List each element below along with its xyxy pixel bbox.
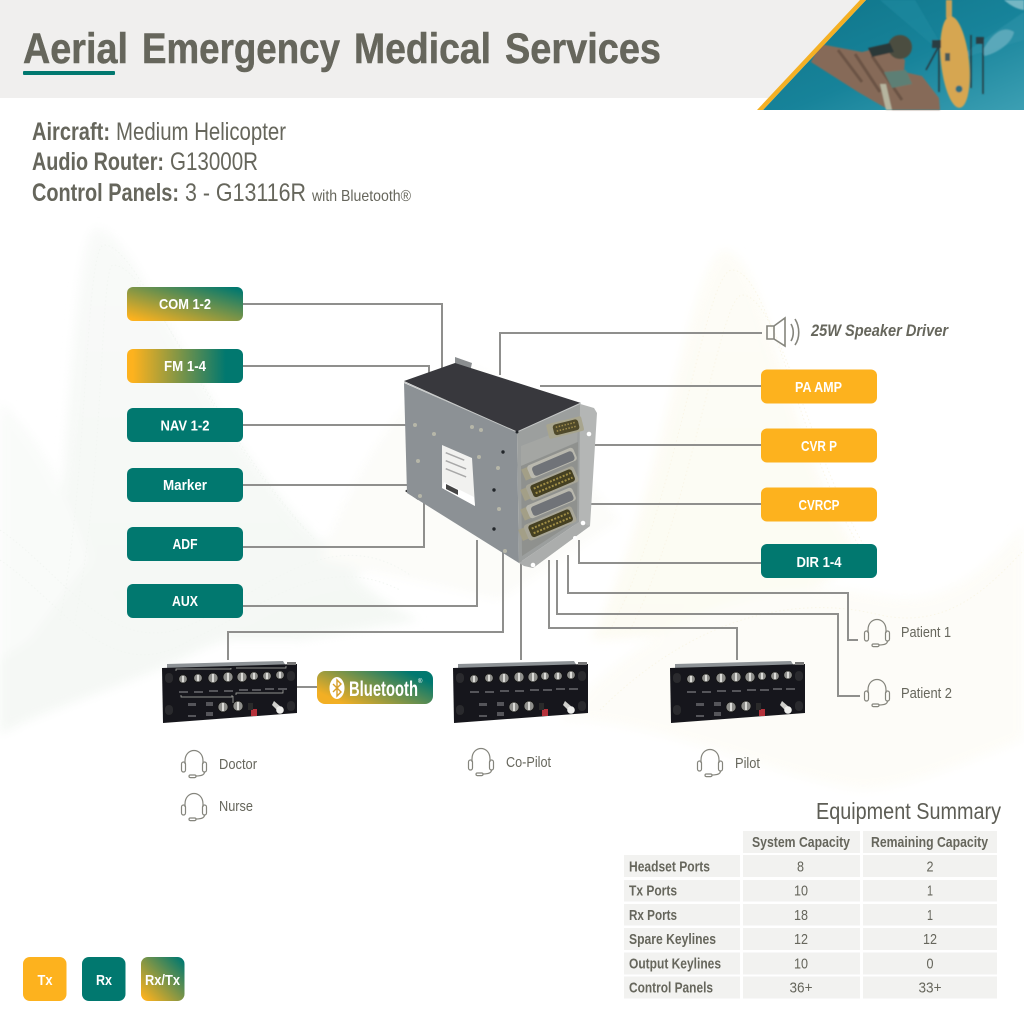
equipment summary table: 10: [794, 882, 808, 900]
control panels line: Control Panels:: [32, 179, 179, 207]
connector: gold D-sub upper: [519, 465, 579, 504]
headset: co-pilot: [468, 748, 552, 776]
header band: [0, 0, 1024, 98]
DIR 1-4: [761, 544, 877, 578]
icon: speaker: [767, 318, 799, 346]
equipment summary table: 2: [926, 858, 934, 876]
AUX: AUX: [172, 593, 198, 610]
equipment summary table: System Capacity: [752, 834, 851, 851]
left foot: [405, 486, 424, 500]
title: Services: [505, 25, 661, 73]
right flange: [528, 403, 597, 568]
connector: small D-sub: [546, 416, 584, 439]
legend: [23, 957, 184, 1001]
aircraft line: [32, 118, 286, 146]
control panel: doctor and nurse: [162, 661, 297, 723]
CVR P: [761, 428, 877, 462]
CVR P: CVR P: [801, 438, 837, 455]
COM 1-2: COM 1-2: [159, 296, 211, 313]
headset: patient 2: [864, 680, 952, 707]
equipment summary table: Output Keylines: [629, 956, 721, 972]
header photo: rescuer and helicopter: [763, 0, 1024, 110]
bluetooth badge: Bluetooth: [349, 678, 418, 701]
equipment summary table: 8: [797, 858, 804, 876]
equipment summary table: Remaining Capacity: [871, 834, 989, 851]
equipment summary table: 18: [794, 907, 808, 924]
legend: Tx: [23, 957, 66, 1001]
equipment summary table: 1: [927, 907, 933, 924]
control panel: co-pilot: [453, 661, 588, 723]
equipment summary table: 1: [927, 882, 933, 900]
back flange: [455, 357, 472, 372]
control panels line: 3 - G13116R: [185, 179, 306, 207]
bluetooth badge: [317, 671, 433, 704]
FM 1-4: [127, 349, 243, 383]
connector: grey D-sub upper: [521, 447, 578, 482]
FM 1-4: FM 1-4: [164, 358, 207, 375]
headset: pilot: Pilot: [735, 755, 761, 772]
system info: [32, 118, 411, 207]
equipment summary table: Control Panels: [629, 980, 713, 996]
top face: [404, 363, 581, 432]
product label: [442, 445, 475, 506]
title underline: [23, 71, 115, 75]
aircraft line: Aircraft:: [32, 118, 110, 146]
title: Emergency: [142, 25, 340, 73]
NAV 1-2: [127, 408, 243, 442]
equipment summary table: 12: [923, 931, 937, 948]
title: Medical: [354, 25, 491, 73]
legend: Rx: [82, 957, 126, 1001]
helicopter: [946, 0, 952, 18]
audio router line: Audio Router:: [32, 148, 164, 176]
title: Aerial: [23, 25, 128, 73]
rescuer: [811, 44, 940, 110]
equipment summary table: 0: [926, 956, 934, 972]
Marker: [127, 468, 243, 502]
connector: grey D-sub lower: [520, 487, 577, 522]
legend: Tx: Tx: [38, 972, 53, 989]
COM 1-2: [127, 287, 243, 321]
speaker driver label: 25W Speaker Driver: [810, 321, 949, 340]
audio router unit: [404, 357, 597, 568]
side face: [404, 383, 519, 563]
control panels line: with Bluetooth®: [311, 188, 411, 205]
headset: co-pilot: Co-Pilot: [506, 754, 552, 771]
ADF: [127, 527, 243, 561]
CVRCP: CVRCP: [798, 497, 840, 514]
screws: [413, 423, 507, 553]
DIR 1-4: DIR 1-4: [796, 554, 842, 571]
CVRCP: [761, 488, 877, 522]
bottom flange: [519, 522, 590, 568]
headset: pilot: [698, 750, 761, 777]
PA AMP: [761, 370, 877, 404]
AUX: [127, 584, 243, 618]
equipment summary table: Spare Keylines: [629, 931, 716, 948]
rotor blur: [955, 12, 1024, 60]
equipment summary table: 12: [794, 931, 808, 948]
headset: nurse: Nurse: [219, 798, 253, 815]
NAV 1-2: NAV 1-2: [160, 418, 210, 434]
equipment summary table: 10: [794, 956, 808, 972]
audio router line: G13000R: [170, 148, 258, 176]
orange header stripe: [757, 0, 866, 110]
headset: patient 1: Patient 1: [901, 624, 951, 641]
headset: nurse: [182, 794, 253, 821]
legend: Rx: Rx: [96, 972, 113, 989]
ADF: ADF: [172, 536, 198, 553]
connection lines: [228, 304, 860, 696]
bluetooth badge: ®: [418, 678, 423, 685]
control panels line: [32, 179, 411, 207]
right output boxes: [761, 370, 877, 578]
equipment summary table: [624, 831, 997, 998]
connector: gold D-sub lower: [517, 505, 577, 544]
headset: patient 2: Patient 2: [901, 685, 952, 702]
control panel: pilot: [670, 661, 805, 723]
headset: doctor: [182, 750, 257, 778]
equipment summary table: Rx Ports: [629, 907, 677, 924]
legend: Rx/Tx: [141, 957, 184, 1001]
headset: doctor: Doctor: [219, 756, 257, 773]
icon: bluetooth: [330, 677, 344, 699]
left input boxes: [127, 287, 243, 618]
equipment summary table: 33+: [918, 980, 942, 996]
PA AMP: PA AMP: [795, 379, 842, 396]
aircraft line: Medium Helicopter: [116, 118, 286, 146]
background waves: [0, 228, 1024, 790]
equipment summary table: Headset Ports: [629, 858, 710, 876]
equipment summary table: Tx Ports: [629, 882, 677, 900]
legend: Rx/Tx: Rx/Tx: [145, 972, 181, 989]
Marker: Marker: [163, 477, 207, 494]
connector face: [517, 404, 580, 563]
headset: patient 1: [864, 620, 951, 647]
equipment summary table: 36+: [790, 980, 813, 996]
